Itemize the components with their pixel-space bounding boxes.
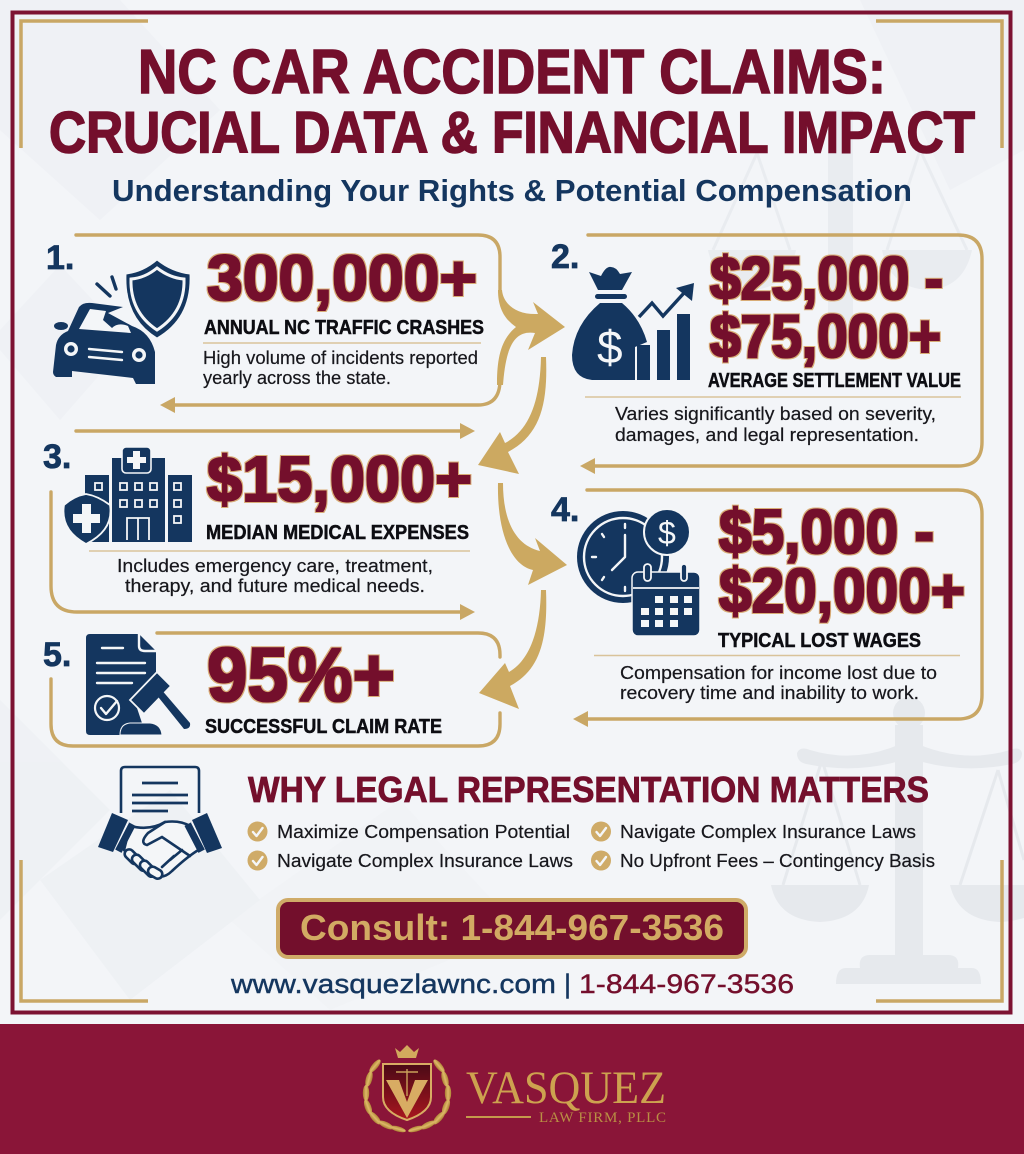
stat value: $75,000+ xyxy=(710,303,941,370)
description: recovery time and inability to work. xyxy=(620,682,919,703)
description: Compensation for income lost due to xyxy=(620,662,937,683)
panel: stat 5 claim rate xyxy=(43,633,442,738)
flow connectors xyxy=(51,235,982,746)
stat value: $5,000 - xyxy=(719,498,934,567)
contact line: www.vasquezlawnc.com xyxy=(230,969,556,999)
arrow: stat 3 to stat 4 xyxy=(498,483,567,585)
number 3: 3. xyxy=(43,438,71,476)
logo crest xyxy=(362,1045,452,1134)
description xyxy=(117,555,433,596)
heading: why legal representation matters: WHY LEGAL REPRESENTATION MATTERS xyxy=(248,769,929,810)
panel: stat 4 lost wages xyxy=(551,491,965,703)
stat value: $25,000 - xyxy=(710,245,943,312)
panel: stat 2 settlement xyxy=(551,238,961,445)
number 4: 4. xyxy=(551,491,579,529)
stat label: MEDIAN MEDICAL EXPENSES xyxy=(206,522,469,544)
description xyxy=(203,347,478,388)
description xyxy=(615,403,936,445)
stat label: AVERAGE SETTLEMENT VALUE xyxy=(708,370,961,392)
benefits checklist: No Upfront Fees – Contingency Basis xyxy=(620,850,935,871)
arrow: stat 1 to stat 2 xyxy=(497,290,565,385)
description: yearly across the state. xyxy=(203,367,391,388)
icon: money bag and rising chart xyxy=(572,267,694,380)
stat value: 95%+ xyxy=(207,633,395,718)
watermark: scales of justice top right xyxy=(708,110,972,350)
benefits checklist: Maximize Compensation Potential xyxy=(277,821,570,842)
logo: Vasquez Law Firm xyxy=(362,1045,666,1134)
title xyxy=(49,38,975,166)
arrow: stat 2 to stat 3 xyxy=(478,357,546,474)
number 5: 5. xyxy=(43,636,71,674)
benefits checklist: Navigate Complex Insurance Laws xyxy=(620,821,916,842)
call to action button: Consult: 1-844-967-3536 xyxy=(300,907,724,948)
subtitle: Understanding Your Rights & Potential Compensation xyxy=(112,173,912,208)
stat value: $20,000+ xyxy=(719,557,965,626)
number 1: 1. xyxy=(46,239,74,277)
footer band xyxy=(0,1024,1024,1154)
contact line: 1-844-967-3536 xyxy=(579,969,794,999)
stat label: SUCCESSFUL CLAIM RATE xyxy=(205,716,442,738)
description xyxy=(620,662,937,703)
contact line xyxy=(230,969,794,999)
icon: crashed car and shield xyxy=(53,260,190,384)
icon: handshake and contract xyxy=(98,767,222,880)
watermark: scales of justice bottom right xyxy=(771,697,1024,984)
stat value: $15,000+ xyxy=(207,443,472,515)
description: High volume of incidents reported xyxy=(203,347,478,368)
benefits checklist: Navigate Complex Insurance Laws xyxy=(277,850,573,871)
stat label: ANNUAL NC TRAFFIC CRASHES xyxy=(204,317,484,339)
icon: clock, coin and calendar: $ xyxy=(658,515,676,551)
logo wordmark: VASQUEZ xyxy=(466,1062,666,1114)
icon: clock, coin and calendar xyxy=(577,509,700,636)
number 2: 2. xyxy=(551,238,579,276)
icon: money bag and rising chart: $ xyxy=(597,321,623,373)
description: Includes emergency care, treatment, xyxy=(117,555,433,576)
panel: stat 1 crashes xyxy=(46,239,484,388)
logo tagline: LAW FIRM, PLLC xyxy=(539,1110,666,1126)
description: damages, and legal representation. xyxy=(615,424,919,445)
stat value xyxy=(719,498,965,626)
stat label: TYPICAL LOST WAGES xyxy=(718,630,921,652)
stat value: 300,000+ xyxy=(207,242,477,314)
contact line: | xyxy=(564,969,571,999)
description: therapy, and future medical needs. xyxy=(125,575,425,596)
description: Varies significantly based on severity, xyxy=(615,403,936,424)
panel: stat 3 medical xyxy=(43,438,472,596)
icon: document and gavel xyxy=(86,634,190,735)
call to action button xyxy=(278,900,746,957)
arrow: stat 4 to stat 5 xyxy=(479,590,546,709)
stat value xyxy=(710,245,943,370)
benefits checklist xyxy=(248,821,935,871)
title: NC CAR ACCIDENT CLAIMS: xyxy=(138,38,886,107)
icon: hospital and shield xyxy=(63,447,192,544)
